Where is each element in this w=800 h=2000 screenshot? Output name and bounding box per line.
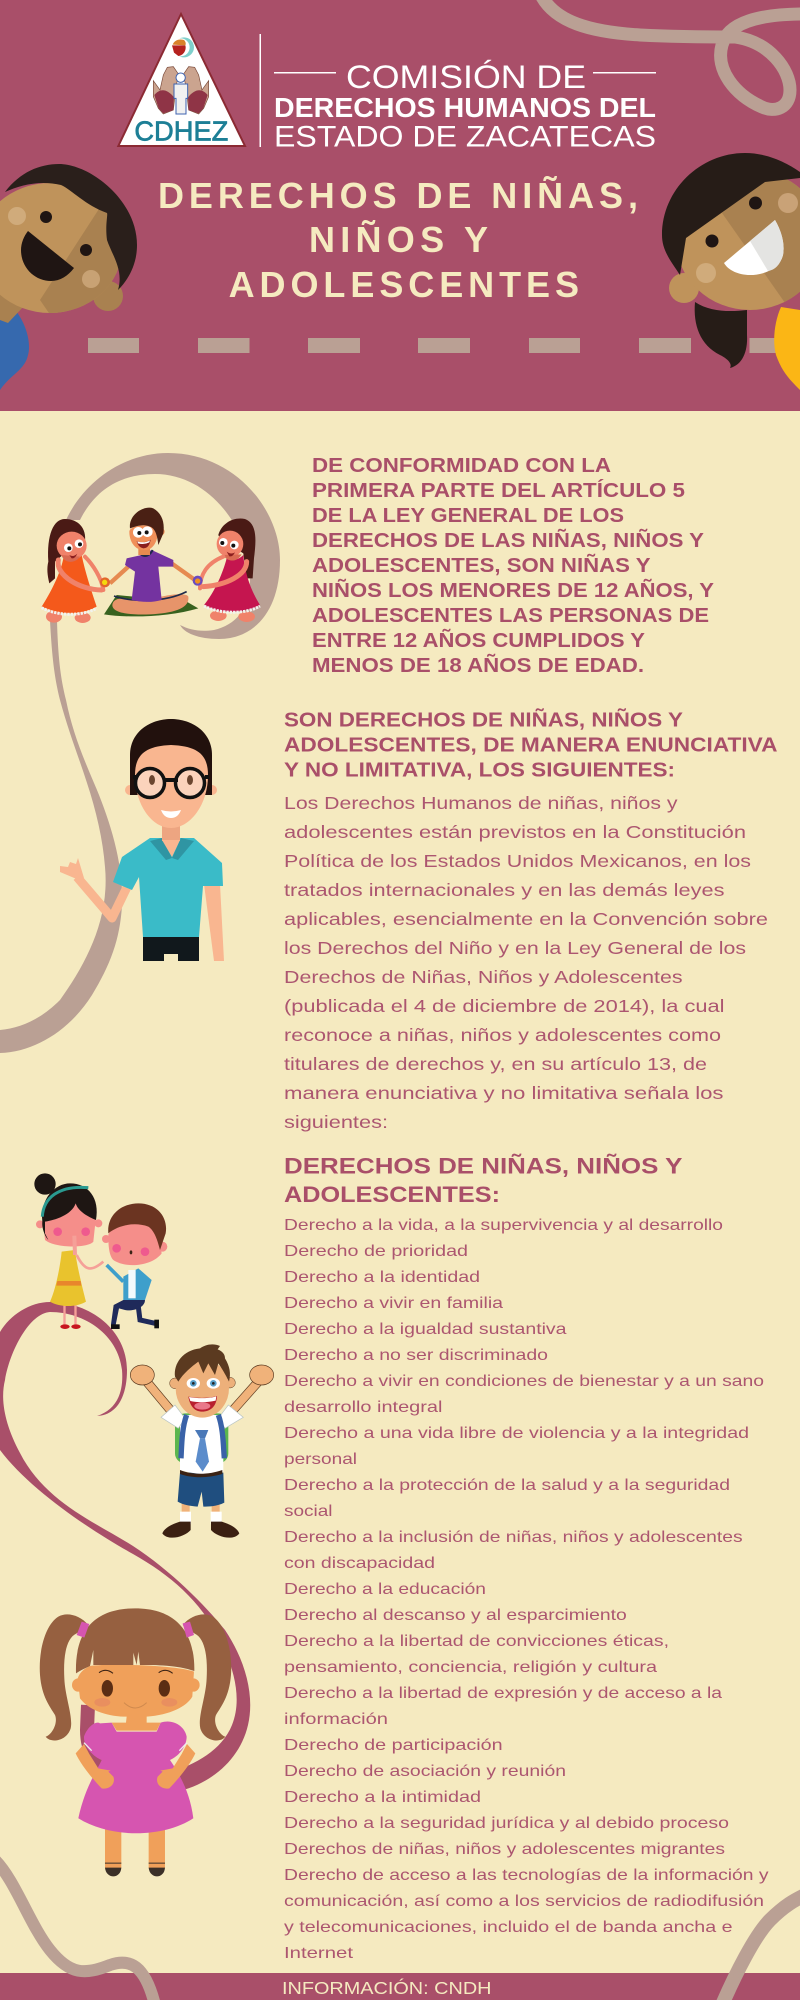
hands <box>153 67 178 114</box>
left girl <box>42 519 103 623</box>
list of rights: comunicación, así como a los servicios de radiodifusión <box>284 1893 764 1910</box>
glasses <box>136 768 164 798</box>
boy with glasses <box>60 719 224 961</box>
girl with pigtails <box>40 1608 231 1876</box>
list of rights <box>284 1217 769 1962</box>
legs, socks and shoes <box>182 1503 190 1513</box>
list of rights: Derecho a la protección de la salud y a la seguridad <box>284 1477 730 1494</box>
paragraph: legal background: Derechos de Niñas, Niños y Adolescentes <box>284 967 683 987</box>
list of rights: personal <box>284 1451 357 1468</box>
section three heading <box>284 1153 682 1207</box>
main title <box>158 174 638 305</box>
logo CDHEZ <box>118 14 245 147</box>
pigtails <box>40 1614 88 1740</box>
list of rights: Derecho de prioridad <box>284 1243 468 1260</box>
paragraph: definition: ADOLESCENTES, SON NIÑAS Y <box>312 554 651 577</box>
list of rights: Derecho a la vida, a la supervivencia y al desarrollo <box>284 1217 723 1234</box>
list of rights: Derecho a vivir en condiciones de bienestar y a un sano <box>284 1373 764 1390</box>
paragraph: definition: MENOS DE 18 AÑOS DE EDAD. <box>312 654 644 677</box>
shirt and sleeves <box>180 1415 223 1474</box>
list of rights: Derecho a una vida libre de violencia y a la integridad <box>284 1425 749 1442</box>
arms <box>76 1744 114 1789</box>
list of rights: y telecomunicaciones, incluido el de banda ancha e <box>284 1919 733 1936</box>
list of rights: Derecho a no ser discriminado <box>284 1347 548 1364</box>
bracelet flowers <box>100 577 110 587</box>
paragraph: heading section two: SON DERECHOS DE NIÑAS, NIÑOS Y <box>284 709 684 732</box>
list of rights: información <box>284 1711 388 1728</box>
waving arm <box>77 877 128 918</box>
list of rights: Derecho de participación <box>284 1737 503 1754</box>
institution name <box>274 59 656 154</box>
paragraph: heading section two: ADOLESCENTES, DE MANERA ENUNCIATIVA <box>284 735 778 757</box>
list of rights: Derecho a la libertad de convicciones éticas, <box>284 1633 669 1650</box>
decorative swirl top right <box>541 0 800 109</box>
paragraph: heading section two <box>284 709 778 782</box>
person <box>176 73 185 82</box>
dashed road line <box>88 338 784 353</box>
decorative swirl bottom right <box>722 1895 800 2000</box>
paragraph: legal background: siguientes: <box>284 1112 388 1132</box>
paragraph: legal background: (publicada el 4 de diciembre de 2014), la cual <box>284 996 724 1016</box>
list of rights: Derecho a la libertad de expresión y de acceso a la <box>284 1685 722 1702</box>
decorative maroon swirl <box>0 1302 250 1792</box>
footer bar <box>0 1973 800 2000</box>
belt <box>180 1470 222 1477</box>
paragraph: definition <box>312 455 715 677</box>
list of rights: Derecho de acceso a las tecnologías de la información y <box>284 1867 769 1884</box>
list of rights: con discapacidad <box>284 1555 435 1572</box>
list of rights: Derecho a vivir en familia <box>284 1295 503 1312</box>
backpack <box>175 1413 228 1463</box>
institution name: COMISIÓN DE <box>346 59 586 95</box>
decorative swirl bottom left <box>0 1860 155 2000</box>
paragraph: heading section two: Y NO LIMITATIVA, LOS SIGUIENTES: <box>284 760 675 782</box>
schoolboy illustration <box>130 1344 274 1538</box>
institution name: ESTADO DE ZACATECAS <box>274 121 656 154</box>
paragraph: legal background: manera enunciativa y no limitativa señala los <box>284 1083 724 1103</box>
paragraph: legal background: reconoce a niñas, niños y adolescentes como <box>284 1025 721 1045</box>
ears <box>72 1678 85 1692</box>
list of rights: social <box>284 1503 332 1520</box>
raised arms <box>147 1382 172 1412</box>
right girl <box>200 519 260 622</box>
logo CDHEZ: CDHEZ <box>134 116 228 147</box>
logo divider <box>260 34 261 147</box>
paragraph: legal background: los Derechos del Niño y en la Ley General de los <box>284 938 746 958</box>
boy in purple shirt <box>110 508 195 614</box>
paragraph: legal background: tratados internacionales y en las demás leyes <box>284 880 725 900</box>
list of rights: desarrollo integral <box>284 1399 442 1416</box>
list of rights: Derechos de niñas, niños y adolescentes migrantes <box>284 1841 725 1858</box>
illustration: three children in a circle <box>42 508 260 623</box>
paragraph: definition: ADOLESCENTES LAS PERSONAS DE <box>312 605 709 627</box>
paragraph: legal background: titulares de derechos y, en su artículo 13, de <box>284 1054 707 1074</box>
list of rights: Derecho de asociación y reunión <box>284 1763 566 1780</box>
main title: DERECHOS DE NIÑAS, <box>158 174 638 216</box>
institution name: DERECHOS HUMANOS DEL <box>274 92 656 123</box>
paragraph: definition: DERECHOS DE LAS NIÑAS, NIÑOS Y <box>312 529 705 552</box>
right child face <box>662 153 800 390</box>
list of rights: Derecho al descanso y al esparcimiento <box>284 1607 627 1624</box>
footer bar: INFORMACIÓN: CNDH <box>282 1977 492 1998</box>
list of rights: Derecho a la identidad <box>284 1269 480 1286</box>
right arm <box>204 884 224 961</box>
list of rights: Derecho a la inclusión de niñas, niños y adolescentes <box>284 1529 743 1546</box>
couple illustration <box>34 1173 167 1329</box>
shorts <box>143 935 199 961</box>
section three heading: ADOLESCENTES: <box>284 1182 500 1207</box>
head <box>170 1378 180 1389</box>
kneeling boy <box>102 1203 167 1329</box>
girl with bun <box>34 1173 103 1329</box>
legs and shoes <box>105 1827 121 1868</box>
paragraph: legal background: adolescentes están previstos en la Constitución <box>284 822 746 842</box>
shirt <box>113 838 223 937</box>
hair <box>76 1608 194 1673</box>
paragraph: legal background: aplicables, esencialmente en la Convención sobre <box>284 909 768 929</box>
shorts <box>178 1473 224 1507</box>
paragraph: definition: PRIMERA PARTE DEL ARTÍCULO 5 <box>312 479 685 502</box>
list of rights: Internet <box>284 1945 354 1962</box>
list of rights: Derecho a la igualdad sustantiva <box>284 1321 567 1338</box>
paragraph: legal background <box>284 793 768 1132</box>
face and neck <box>78 1665 194 1731</box>
dress <box>78 1721 193 1833</box>
paragraph: legal background: Política de los Estados Unidos Mexicanos, en los <box>284 851 751 871</box>
tie <box>195 1430 208 1438</box>
straps <box>181 1415 187 1458</box>
main title: ADOLESCENTES <box>229 264 579 305</box>
decorative swirl around children <box>0 453 280 1053</box>
list of rights: Derecho a la educación <box>284 1581 486 1598</box>
paragraph: definition: NIÑOS LOS MENORES DE 12 AÑOS, Y <box>312 579 715 602</box>
green mat <box>104 595 198 616</box>
eyes, brows, cheeks, smile <box>99 1670 113 1673</box>
hair ties <box>77 1622 89 1638</box>
list of rights: pensamiento, conciencia, religión y cultura <box>284 1659 657 1676</box>
paragraph: definition: ENTRE 12 AÑOS CUMPLIDOS Y <box>312 629 646 652</box>
section three heading: DERECHOS DE NIÑAS, NIÑOS Y <box>284 1153 682 1178</box>
list of rights: Derecho a la intimidad <box>284 1789 481 1806</box>
paragraph: legal background: Los Derechos Humanos de niñas, niños y <box>284 793 678 813</box>
main title: NIÑOS Y <box>309 218 488 260</box>
head <box>125 785 130 795</box>
list of rights: Derecho a la seguridad jurídica y al debido proceso <box>284 1815 729 1832</box>
smile <box>161 810 181 818</box>
left child face <box>0 164 137 390</box>
header band <box>0 0 800 411</box>
paragraph: definition: DE CONFORMIDAD CON LA <box>312 455 611 477</box>
paragraph: definition: DE LA LEY GENERAL DE LOS <box>312 505 624 527</box>
